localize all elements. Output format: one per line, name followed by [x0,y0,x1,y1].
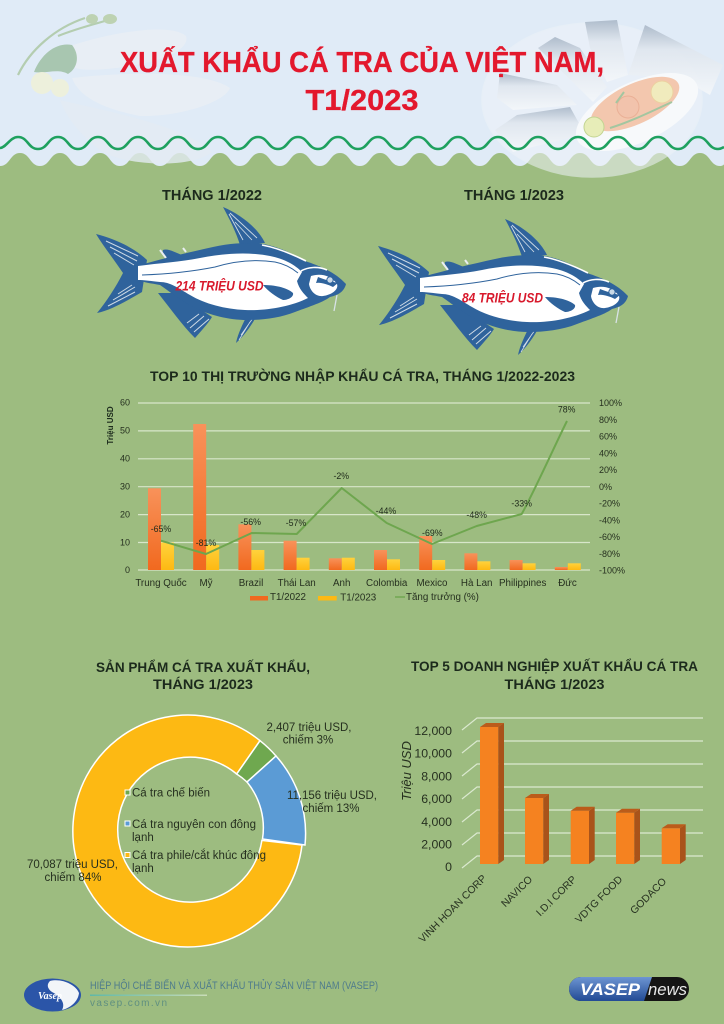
left axis labels [120,398,130,575]
y-axis labels: 8,000 [421,769,452,783]
slice: frozen fillet [73,715,302,947]
legend [125,788,266,875]
bar: I.D.I Corp [571,807,595,864]
fish: January 2022 [96,207,346,343]
title [120,45,604,117]
organisation name: HIỆP HỘI CHẾ BIẾN VÀ XUẤT KHẨU THỦY SẢN VIỆT NAM (VASEP) [90,979,378,992]
bars: T1/2022 [148,424,568,570]
right axis labels: -60% [599,532,620,542]
data labels: 11,156 triệu USD, [287,790,377,802]
y-axis labels: 2,000 [421,837,452,851]
category labels: Mexico [416,578,448,589]
right axis labels: -40% [599,515,620,525]
growth data labels: -2% [333,471,349,481]
right axis labels: -20% [599,498,620,508]
left axis labels: 30 [120,482,130,492]
left axis labels: 20 [120,510,130,520]
bar: VDTG Food [616,809,640,864]
growth data labels: -44% [376,506,396,516]
heading: products: SẢN PHẨM CÁ TRA XUẤT KHẨU, [96,658,310,675]
bars: T1/2023 [161,542,581,570]
growth data labels: -33% [511,498,532,508]
left axis labels: 40 [120,454,130,464]
logo: VASEP news: news [648,980,687,999]
photo: fish fillets and herbs [18,14,230,164]
legend: Cá tra nguyên con đông [132,819,256,831]
photo: plate of fish cuts [482,20,723,177]
y-axis labels: 10,000 [414,747,452,761]
growth data labels [151,404,576,548]
heading: products [96,658,310,692]
category labels: Anh [333,578,350,589]
header band [0,0,724,180]
left axis title: Triệu USD [106,406,115,445]
heading: month 2023: THÁNG 1/2023 [464,187,564,204]
logo: VASEP news [569,977,689,1001]
data labels: chiếm 3% [283,734,333,746]
heading: top 10 markets: TOP 10 THỊ TRƯỜNG NHẬP KHẨU CÁ TRA, THÁNG 1/2022-2023 [150,367,575,384]
data labels [27,722,377,884]
category labels: Đức [558,578,577,589]
slice: whole frozen [247,756,306,845]
category labels: Hà Lan [461,578,492,589]
logo: VASEP globe [24,978,81,1012]
legend [250,592,479,604]
left axis labels: 0 [125,565,130,575]
title: XUẤT KHẨU CÁ TRA CỦA VIỆT NAM, [120,45,604,79]
heading: top 5 companies [411,657,698,692]
y-axis title: Triệu USD [399,741,414,801]
category labels: Brazil [239,578,263,589]
right axis labels: 100% [599,398,622,408]
value: 214 million USD: 214 TRIỆU USD [175,276,264,294]
value: 84 million USD: 84 TRIỆU USD [462,288,543,306]
growth data labels: -57% [286,518,306,528]
company labels: VINH HOAN CORP [417,873,489,945]
growth data labels: -69% [422,528,443,538]
growth data labels: -56% [240,517,261,527]
heading: top 5 companies: TOP 5 DOANH NGHIỆP XUẤT KHẨU CÁ TRA [411,657,698,674]
left axis labels: 50 [120,426,130,436]
combo chart: top 10 markets [106,398,625,604]
company labels: NAVICO [500,874,535,910]
logo: VASEP news: VASEP [580,980,641,999]
left axis labels: 60 [120,398,130,408]
bar: Navico [525,794,549,864]
right axis labels: -100% [599,566,625,576]
y-axis labels [414,724,452,874]
company labels [417,873,669,945]
bar: Godaco [662,824,686,864]
fish: January 2023 [378,219,628,355]
legend: Cá tra chế biến [132,788,210,800]
right axis labels: 40% [599,448,617,458]
heading: products: THÁNG 1/2023 [153,676,253,692]
legend: Cá tra phile/cắt khúc đông [132,849,266,862]
growth line [161,421,567,554]
bar: Vinh Hoan [480,723,504,864]
company labels: I.D.I CORP [535,874,579,919]
category labels: Colombia [366,578,408,589]
right axis labels: 20% [599,465,617,475]
data labels: 70,087 triệu USD, [27,859,118,871]
y-axis labels: 4,000 [421,815,452,829]
right axis labels: 80% [599,415,617,425]
footer divider [90,994,207,996]
category labels: Mỹ [199,578,213,589]
data labels: 2,407 triệu USD, [266,722,352,734]
right axis labels: 60% [599,432,617,442]
legend: lạnh [132,863,154,875]
heading: month 2022: THÁNG 1/2022 [162,187,262,204]
website: vasep.com.vn [90,998,167,1009]
legend: Tăng trưởng (%) [406,592,479,603]
data labels: chiếm 13% [303,803,359,815]
heading: top 5 companies: THÁNG 1/2023 [504,676,605,692]
category labels [135,578,577,589]
data labels: chiếm 84% [45,872,101,884]
right axis labels [599,398,625,576]
category labels: Philippines [499,578,546,589]
legend: lạnh [132,832,154,844]
y-axis labels: 12,000 [414,724,452,738]
company labels: GODACO [629,876,669,917]
legend: T1/2023 [340,592,377,604]
right axis labels: -80% [599,549,620,559]
3D bar chart: top 5 companies [399,718,703,945]
growth data labels: -65% [151,524,171,534]
y-axis labels: 6,000 [421,792,452,806]
legend: T1/2022 [270,592,306,603]
company labels: VDTG FOOD [574,874,625,926]
growth data labels: -81% [196,538,216,548]
y-axis labels: 0 [445,860,452,874]
title: T1/2023 [306,85,418,117]
category labels: Trung Quốc [135,578,187,589]
green wave line [0,137,724,149]
category labels: Thái Lan [278,578,316,589]
growth data labels: -48% [466,510,487,520]
logo: VASEP globe: Vasep [38,991,62,1002]
donut chart: products [27,715,377,947]
growth data labels: 78% [558,404,576,414]
right axis labels: 0% [599,482,612,492]
slice: processed [237,741,276,782]
left axis labels: 10 [120,538,130,548]
